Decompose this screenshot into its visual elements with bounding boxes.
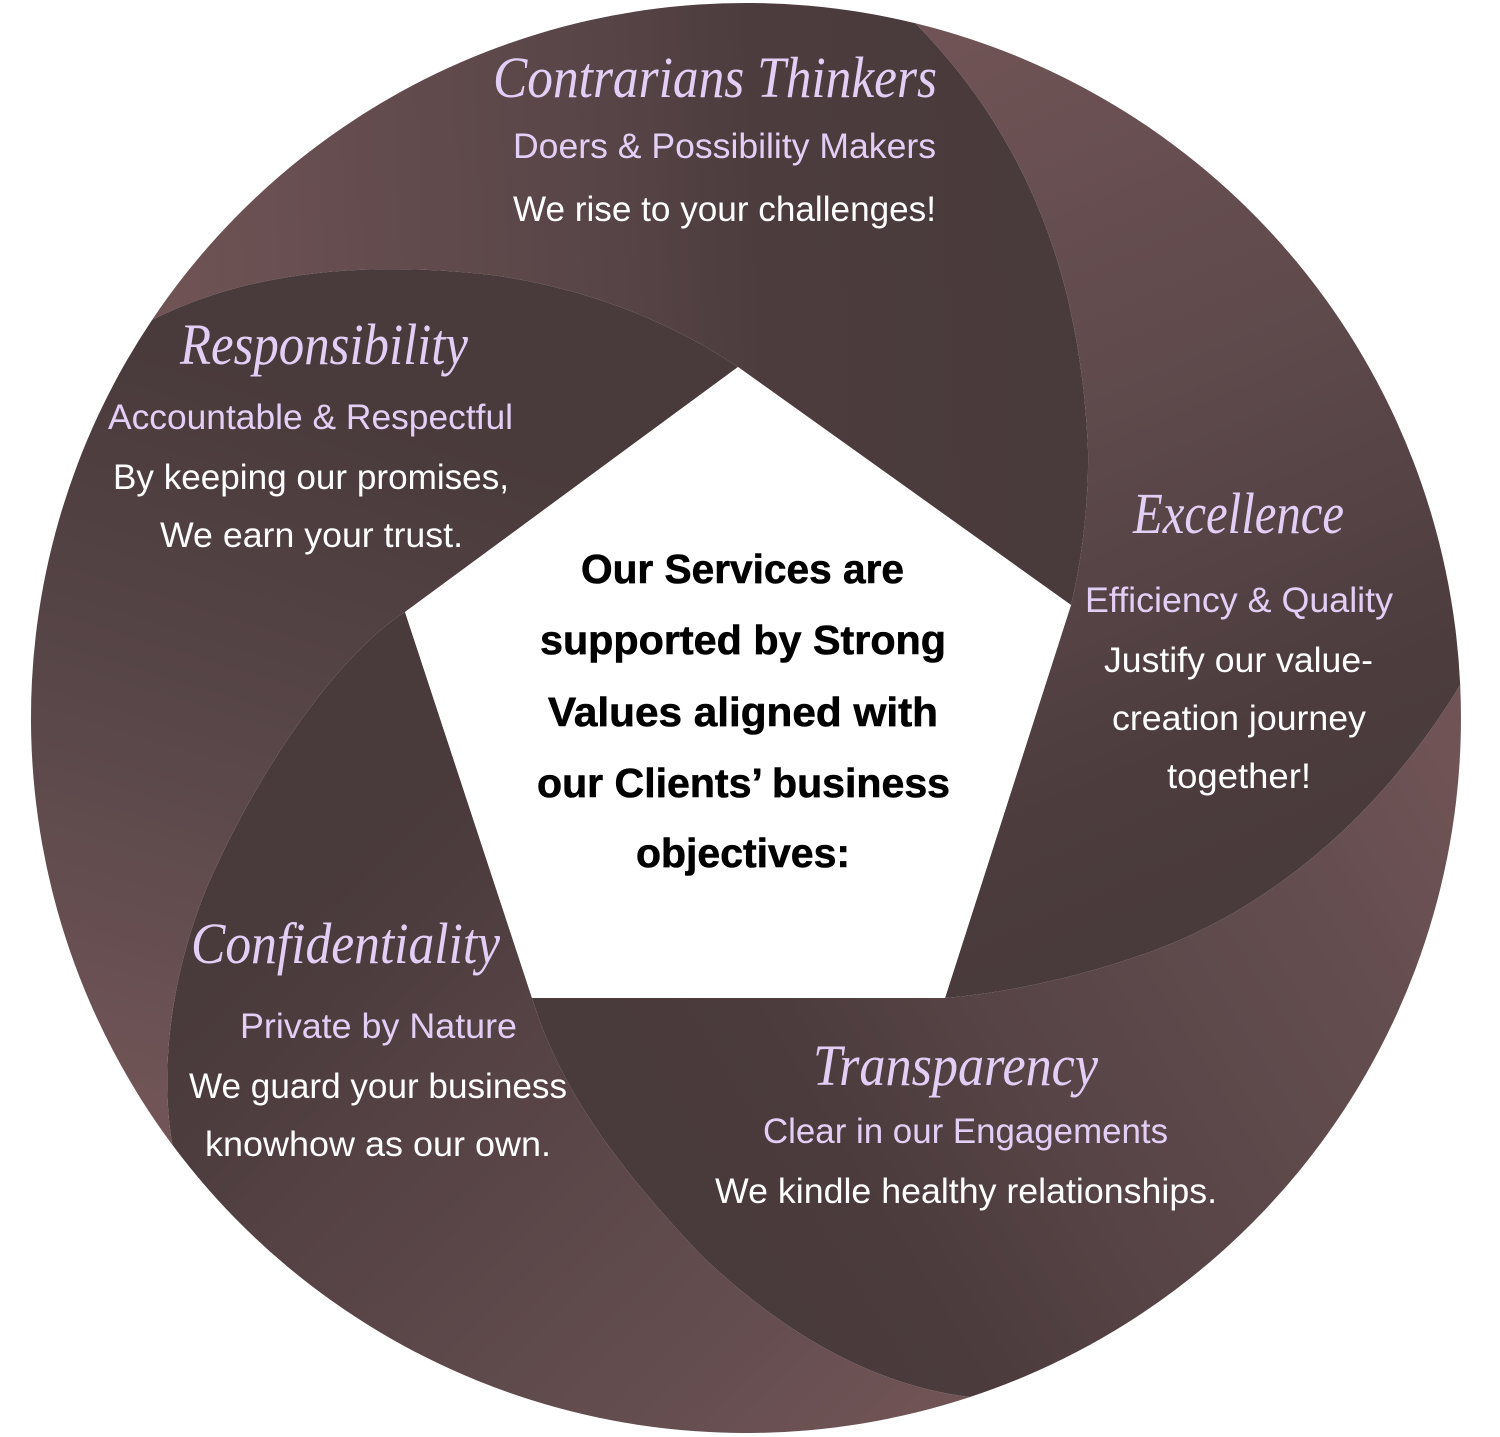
text block: Confidentiality: [189, 911, 567, 1164]
blade: right: [915, 23, 1460, 998]
heading: Confidentiality: [191, 911, 500, 976]
center line 3: Values aligned with: [548, 689, 938, 735]
description: We rise to your challenges!: [513, 190, 936, 229]
blade: top: [152, 3, 1088, 605]
heading: Transparency: [813, 1033, 1098, 1098]
description line 1: By keeping our promises,: [113, 458, 509, 497]
subheading: Clear in our Engagements: [763, 1112, 1168, 1151]
subheading: Doers & Possibility Makers: [513, 127, 936, 166]
description line 2: creation journey: [1112, 699, 1366, 738]
heading: Excellence: [1132, 481, 1344, 546]
description line 1: Justify our value-: [1104, 641, 1373, 680]
text block: Excellence: [1085, 481, 1394, 796]
heading: Responsibility: [179, 312, 468, 377]
text block: center statement: [537, 546, 950, 876]
center line 5: objectives:: [636, 830, 850, 876]
description line 2: We earn your trust.: [160, 516, 463, 555]
center line 1: Our Services are: [581, 546, 904, 592]
description line 3: together!: [1167, 757, 1311, 796]
subheading: Accountable & Respectful: [108, 398, 513, 437]
blade: bottom right: [532, 685, 1461, 1397]
text block: Responsibility: [108, 312, 513, 555]
center pentagon: [405, 367, 1071, 998]
description line 1: We guard your business: [189, 1067, 567, 1106]
description: We kindle healthy relationships.: [715, 1172, 1217, 1211]
subheading: Efficiency & Quality: [1085, 581, 1394, 620]
subheading: Private by Nature: [240, 1007, 517, 1046]
blade: bottom left: [167, 612, 970, 1433]
text block: Transparency: [715, 1033, 1217, 1211]
text block: Contrarians Thinkers: [493, 45, 937, 229]
blade: left: [31, 269, 738, 1145]
description line 2: knowhow as our own.: [205, 1125, 551, 1164]
heading: Contrarians Thinkers: [493, 45, 937, 110]
center line 4: our Clients’ business: [537, 760, 950, 806]
center line 2: supported by Strong: [540, 617, 946, 663]
